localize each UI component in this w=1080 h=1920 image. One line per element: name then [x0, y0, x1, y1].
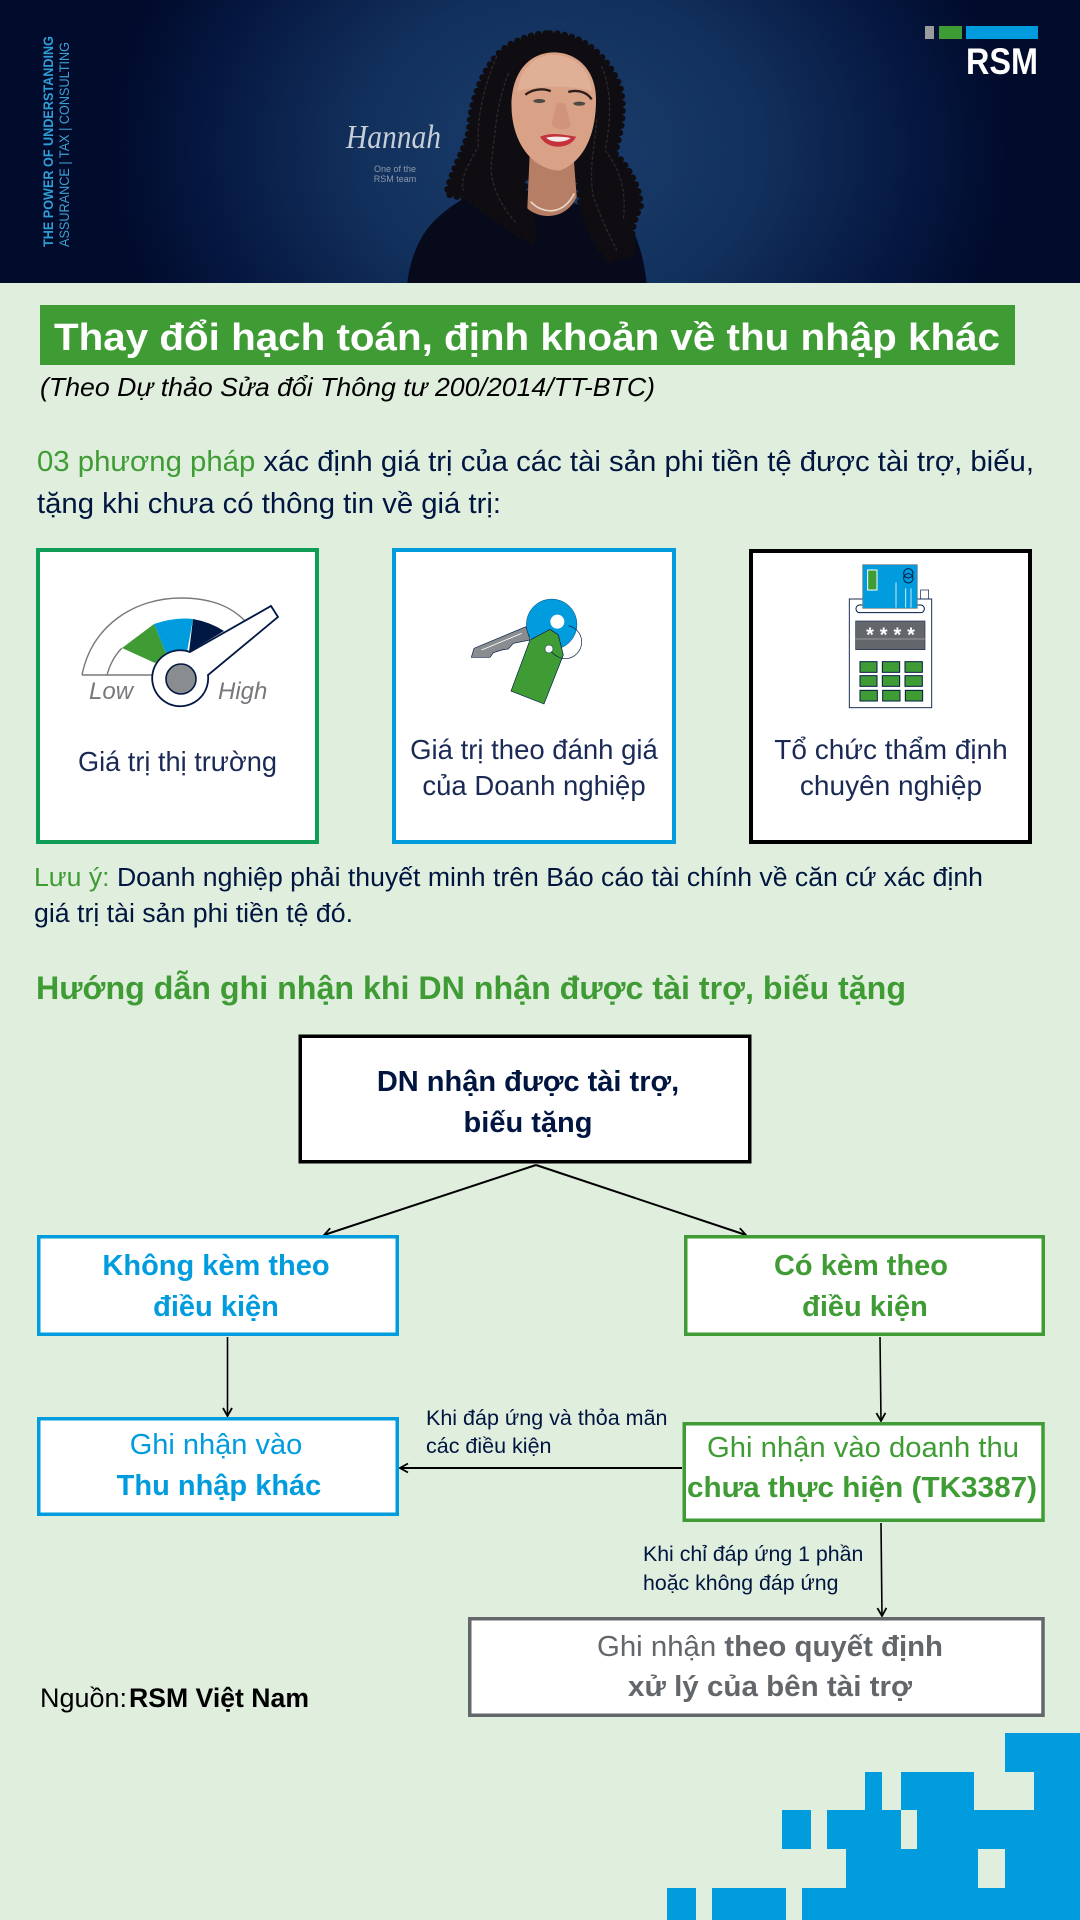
label: [774, 734, 1008, 801]
arrow: to other income: [400, 1467, 682, 1469]
source: [40, 1683, 309, 1713]
header banner: [0, 0, 1080, 283]
panel: enterprise valuation: [394, 550, 674, 842]
signature and caption: RSM team: [374, 174, 416, 184]
intro text: 03 phương pháp xác định giá trị của các tài sản phi tiền tệ được tài trợ, biếu,: [37, 446, 1034, 478]
flow box: received grant: biếu tặng: [464, 1107, 592, 1139]
subtitle: (Theo Dự thảo Sửa đổi Thông tư 200/2014/TT-BTC): [40, 372, 655, 402]
label: Tổ chức thẩm định: [774, 734, 1008, 765]
flow box: grantor decision: [470, 1619, 1043, 1715]
flow box: other income: Ghi nhận vào: [130, 1429, 302, 1461]
flow box: conditional: Có kèm theo: [774, 1250, 948, 1282]
icon: card terminal: *: [866, 625, 874, 647]
decorative pixel pattern: [667, 1733, 1080, 1920]
note: Lưu ý: Doanh nghiệp phải thuyết minh trên Báo cáo tài chính về căn cứ xác định: [34, 864, 983, 892]
icon: key and tag: [471, 599, 582, 704]
label: Giá trị theo đánh giá: [410, 734, 659, 765]
condition label: fully met: các điều kiện: [426, 1434, 552, 1458]
RSM logo: RSM: [966, 41, 1038, 82]
arrow: conditional to deferred revenue: [880, 1337, 881, 1421]
flow box: grantor decision: xử lý của bên tài trợ: [628, 1671, 912, 1703]
flow box: conditional: điều kiện: [802, 1291, 928, 1323]
flow box: grantor decision: Ghi nhận theo quyết định: [597, 1631, 943, 1663]
intro text: [37, 446, 1034, 520]
label: chuyên nghiệp: [800, 770, 982, 801]
flow box: deferred revenue: chưa thực hiện (TK3387): [687, 1472, 1037, 1504]
RSM logo: [925, 26, 1038, 82]
flow box: conditional: [686, 1237, 1043, 1334]
source: Nguồn:: [40, 1683, 127, 1713]
panel: market value: [38, 550, 317, 842]
icon: card terminal: *: [907, 625, 915, 647]
section heading: Hướng dẫn ghi nhận khi DN nhận được tài trợ, biếu tặng: [36, 970, 906, 1006]
source: RSM Việt Nam: [129, 1683, 309, 1713]
tagline vertical text: [40, 36, 72, 247]
portrait photo: [407, 33, 647, 283]
title bar: Thay đổi hạch toán, định khoản về thu nhập khác: [54, 317, 1000, 359]
label: Giá trị thị trường: [78, 746, 277, 777]
icon: card terminal: [849, 565, 932, 708]
icon: gauge: [82, 598, 278, 706]
flow box: deferred revenue: [684, 1424, 1043, 1520]
condition label: partly met: [643, 1542, 863, 1595]
icon: gauge: High: [218, 678, 267, 705]
flow box: unconditional: điều kiện: [153, 1291, 279, 1323]
note: giá trị tài sản phi tiền tệ đó.: [34, 900, 353, 928]
condition label: partly met: Khi chỉ đáp ứng 1 phần: [643, 1542, 863, 1566]
note: [34, 864, 983, 928]
tagline vertical text: THE POWER OF UNDERSTANDING: [40, 36, 56, 247]
condition label: partly met: hoặc không đáp ứng: [643, 1571, 838, 1595]
flow box: other income: Thu nhập khác: [117, 1470, 321, 1502]
panel: professional appraisal: [751, 551, 1030, 842]
icon: gauge: Low: [89, 678, 135, 705]
title bar: [40, 305, 1015, 365]
intro text: tặng khi chưa có thông tin về giá trị:: [37, 488, 501, 520]
arrow: to unconditional: [324, 1165, 536, 1235]
label: [410, 734, 659, 801]
icon: card terminal: *: [880, 625, 888, 647]
signature and caption: [345, 119, 441, 184]
flow box: other income: [39, 1419, 397, 1514]
arrow: to grantor decision: [881, 1523, 882, 1616]
icon: card terminal: *: [893, 625, 901, 647]
flow box: received grant: [300, 1036, 750, 1162]
signature and caption: Hannah: [345, 119, 441, 156]
flow box: unconditional: Không kèm theo: [102, 1250, 330, 1282]
arrow: to conditional: [536, 1165, 746, 1235]
signature and caption: One of the: [374, 164, 416, 174]
condition label: fully met: Khi đáp ứng và thỏa mãn: [426, 1406, 668, 1430]
label: của Doanh nghiệp: [422, 770, 646, 801]
flow box: deferred revenue: Ghi nhận vào doanh thu: [707, 1432, 1019, 1464]
arrow: unconditional to other income: [226, 1337, 228, 1416]
flow box: unconditional: [39, 1237, 397, 1334]
flow box: received grant: DN nhận được tài trợ,: [377, 1066, 679, 1098]
condition label: fully met: [426, 1406, 668, 1458]
tagline vertical text: ASSURANCE | TAX | CONSULTING: [56, 42, 72, 247]
